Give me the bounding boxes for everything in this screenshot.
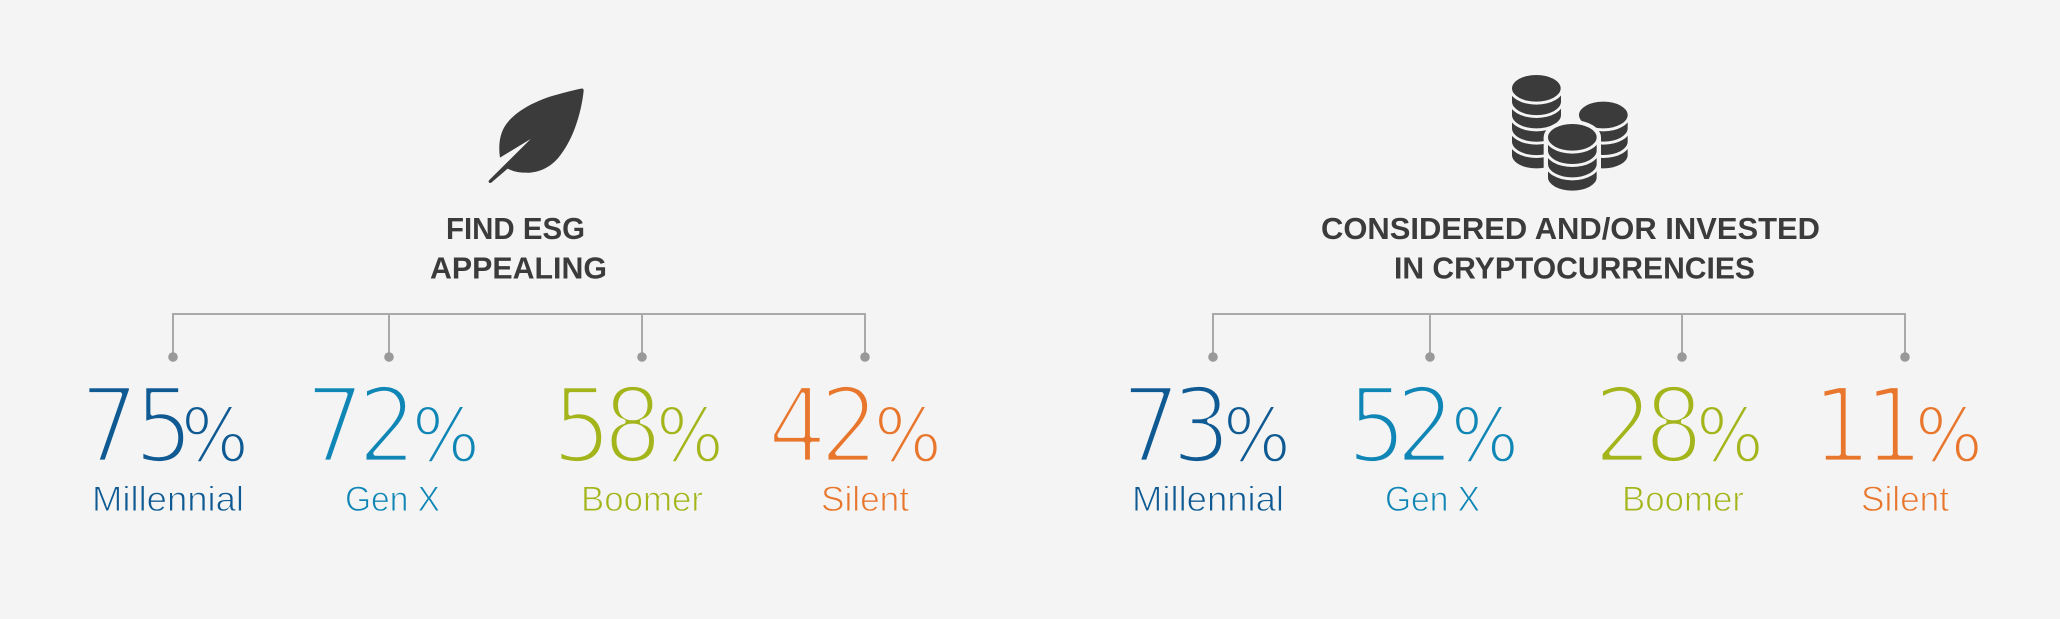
icon: leaf [489,89,584,183]
stat: silent 11% [1812,366,1983,519]
stat: millennial 73%: 73 [1121,366,1231,487]
stat: silent 11%: % [1915,393,1983,480]
stat: boomer 58% [552,366,724,519]
panel: considered and/or invested in cryptocurrencies [1121,72,1983,519]
stat: silent 42% [768,366,942,519]
stat: boomer 28%: 28 [1594,366,1704,487]
stat: silent 42%: % [874,393,942,480]
connector tree [168,314,870,362]
stat: silent 11%: 11 [1812,366,1924,487]
stat: millennial 75% [80,366,249,519]
heading: considered and/or invested in cryptocurrencies [1321,211,1820,286]
stat: millennial 73%: % [1223,393,1291,480]
heading: considered and/or invested in cryptocurrencies: IN CRYPTOCURRENCIES [1394,250,1755,286]
stat: boomer 58%: 58 [552,366,663,487]
heading: find ESG appealing: APPEALING [430,250,607,286]
stat: boomer 58%: Boomer [581,480,703,519]
stat: silent 42%: 42 [768,366,879,487]
heading: considered and/or invested in cryptocurrencies: CONSIDERED AND/OR INVESTED [1321,211,1820,246]
stat: boomer 28%: Boomer [1622,480,1744,519]
stat: gen x 72%: Gen X [345,480,440,519]
icon: coin stacks [1509,72,1631,194]
stat: gen x 72%: % [412,393,480,480]
stat: gen x 52%: Gen X [1385,480,1480,519]
heading: find ESG appealing [430,211,607,286]
stat: millennial 73%: Millennial [1132,480,1284,519]
stat: boomer 58%: % [656,393,724,480]
stat: gen x 52%: 52 [1347,366,1455,487]
stat: gen x 72%: 72 [305,366,417,487]
stat: silent 11%: Silent [1861,480,1949,519]
stat: silent 42%: Silent [821,480,909,519]
stat: gen x 72% [305,366,480,519]
stat: millennial 73% [1121,366,1291,519]
stat: millennial 75%: 75 [80,366,194,487]
stat: millennial 75%: % [181,393,249,480]
connector tree [1208,314,1910,362]
stat: gen x 52% [1347,366,1519,519]
stat: millennial 75%: Millennial [92,480,244,519]
stat: boomer 28% [1594,366,1764,519]
stat: boomer 28%: % [1696,393,1764,480]
stat: gen x 52%: % [1451,393,1519,480]
heading: find ESG appealing: FIND ESG [446,211,585,246]
panel: find ESG appealing [80,89,942,519]
